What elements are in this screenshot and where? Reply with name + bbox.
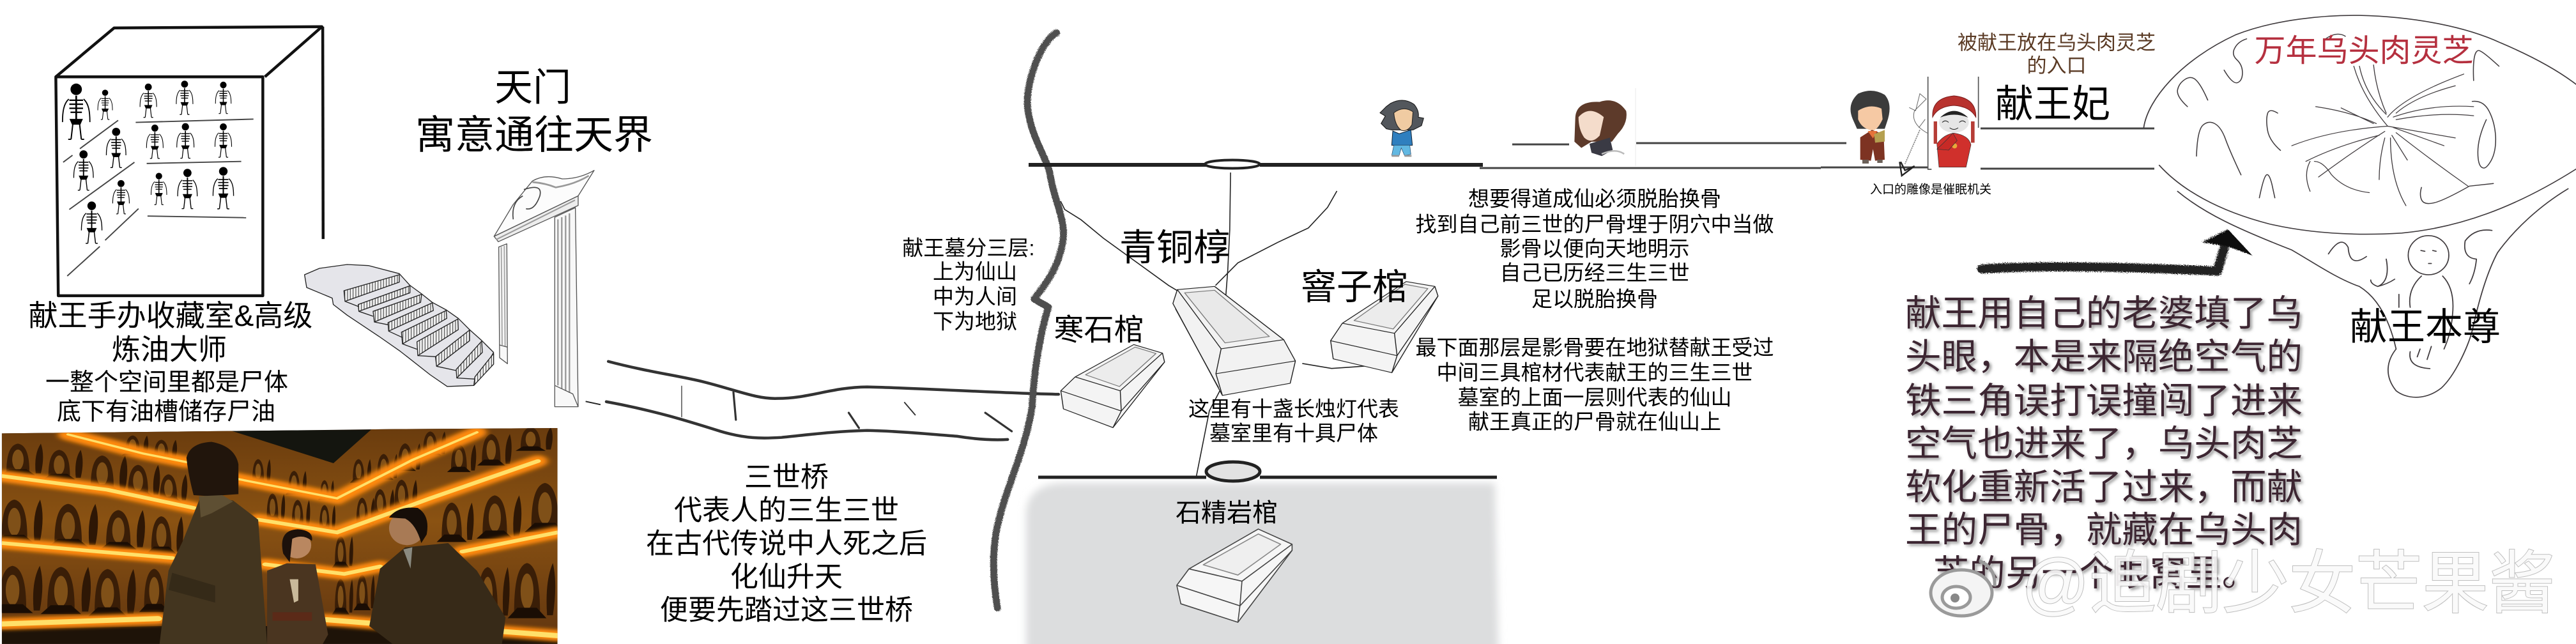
character: curly hair woman bbox=[1574, 100, 1627, 156]
wall niches bbox=[0, 427, 575, 618]
text: hypnosis statue note: 入口的雕像是催眠机关 bbox=[1870, 183, 1991, 197]
three-lives bridge bbox=[606, 362, 1059, 440]
text: entry note: 的入口 bbox=[2027, 55, 2087, 77]
text: burial explanation: 中间三具棺材代表献王的三生三世 bbox=[1436, 360, 1753, 385]
statue sketch and arrow bbox=[1899, 94, 1928, 176]
text: three-lives bridge: 在古代传说中人死之后 bbox=[646, 528, 927, 560]
coffin: bronze bbox=[1173, 286, 1296, 395]
mushroom cap bbox=[2143, 15, 2576, 128]
text: entry note: 被献王放在乌头肉灵芝 bbox=[1958, 32, 2156, 54]
illuminated walls bbox=[2, 428, 558, 634]
icon: weibo logo bbox=[1931, 561, 1995, 616]
heading: collection room: 底下有油槽储存尸油 bbox=[57, 399, 275, 425]
lit shelves bbox=[2, 433, 558, 636]
photo: film still of the oil chamber bbox=[0, 422, 575, 644]
diagram: giant mushroom and king bbox=[2143, 15, 2576, 397]
coffin: cellar bbox=[1331, 282, 1438, 372]
text: burial explanation: 献王真正的尸骨就在仙山上 bbox=[1468, 410, 1721, 433]
text: main story bbox=[1905, 293, 2303, 593]
bride with niche bbox=[1928, 77, 1979, 169]
stem and body bbox=[2177, 188, 2568, 397]
text: three-lives bridge: 三世桥 bbox=[744, 461, 829, 493]
label: cold stone coffin: 寒石棺 bbox=[1054, 313, 1144, 346]
text: three layers of the tomb: 下为地狱 bbox=[933, 309, 1017, 334]
heading: collection room: 炼油大师 bbox=[112, 334, 227, 365]
text: burial explanation: 墓室的上面一层则代表的仙山 bbox=[1458, 386, 1731, 409]
coffin: stone essence bbox=[1177, 529, 1292, 622]
label: cellar coffin: 窨子棺 bbox=[1301, 267, 1408, 307]
character: long hair man bbox=[1380, 100, 1423, 157]
text: main story: 王的尸骨，就藏在乌头肉 bbox=[1905, 510, 2303, 549]
label: mushroom title: 万年乌头肉灵芝 bbox=[2254, 34, 2474, 68]
skeletons bbox=[63, 80, 234, 243]
text: three layers of the tomb: 上为仙山 bbox=[933, 259, 1017, 284]
text: three-lives bridge: 化仙升天 bbox=[730, 561, 843, 593]
heading: collection room bbox=[29, 299, 312, 425]
text: three layers of the tomb bbox=[902, 236, 1035, 334]
text: ten lamps: 这里有十盏长烛灯代表 bbox=[1188, 397, 1399, 420]
brush wall line bbox=[993, 33, 1064, 608]
text: ten lamps bbox=[1188, 397, 1399, 445]
ceiling bbox=[229, 430, 373, 463]
text: burial explanation: 最下面那层是影骨要在地狱替献王受过 bbox=[1416, 336, 1774, 359]
text: three layers of the tomb: 中为人间 bbox=[933, 285, 1017, 308]
man at right bbox=[369, 507, 505, 644]
arrow bbox=[1982, 229, 2252, 271]
text: main story: 铁三角误打误撞闯了进来 bbox=[1905, 381, 2303, 420]
heading: collection room: 一整个空间里都是尸体 bbox=[45, 369, 288, 396]
niche outline bbox=[1928, 77, 1979, 169]
text: three-lives bridge: 代表人的三生三世 bbox=[674, 494, 899, 526]
thin connection lines bbox=[1061, 172, 1396, 477]
lower level grey zone bbox=[1026, 483, 1499, 644]
heaven gate door bbox=[494, 171, 601, 407]
text: burial explanation: 找到自己前三世的尸骨埋于阴穴中当做 bbox=[1416, 212, 1774, 236]
mushroom curls bbox=[2177, 34, 2499, 204]
text: three-lives bridge bbox=[646, 461, 927, 626]
heading: collection room: 献王手办收藏室&高级 bbox=[29, 299, 312, 332]
text: three layers of the tomb: 献王墓分三层: bbox=[902, 236, 1035, 259]
box outline bbox=[56, 27, 323, 296]
stairs bbox=[305, 264, 494, 387]
character: man in red coat bbox=[1850, 91, 1890, 164]
panel: handmade collection room box bbox=[56, 27, 323, 296]
man at left bbox=[160, 442, 267, 644]
label: bronze coffin: 青铜椁 bbox=[1119, 227, 1230, 268]
mushroom mycelium bbox=[2292, 65, 2474, 206]
label: king himself: 献王本尊 bbox=[2350, 306, 2501, 348]
coffins bbox=[1061, 282, 1438, 622]
text: main story: 空气也进来了，乌头肉芝 bbox=[1905, 423, 2303, 464]
text: burial explanation: 自己已历经三生三世 bbox=[1500, 261, 1689, 285]
woman in centre bbox=[267, 529, 328, 644]
heading: heaven gate: 天门 bbox=[494, 66, 571, 109]
label: stone essence coffin: 石精岩棺 bbox=[1176, 499, 1278, 527]
pediment bbox=[494, 171, 594, 236]
bride figure bbox=[1933, 96, 1976, 167]
text: burial explanation bbox=[1416, 187, 1774, 433]
king figure bbox=[2399, 236, 2453, 369]
right pillar bbox=[555, 208, 578, 407]
glow of lit shelves bbox=[2, 433, 558, 636]
text: main story: 软化重新活了过来，而献 bbox=[1905, 466, 2303, 507]
text: main story: 献王用自己的老婆填了乌 bbox=[1905, 293, 2303, 334]
text: burial explanation: 足以脱胎换骨 bbox=[1531, 288, 1658, 310]
heading: heaven gate bbox=[415, 66, 653, 157]
figures in the photo bbox=[160, 442, 505, 644]
heading: heaven gate: 寓意通往天界 bbox=[415, 114, 653, 157]
text: main story: 芝的另一个眼窝里。 bbox=[1933, 553, 2258, 593]
left pillar bbox=[499, 244, 507, 364]
shelves bbox=[63, 119, 254, 276]
text: entry note bbox=[1958, 32, 2156, 77]
coffin: cold stone bbox=[1061, 344, 1165, 427]
text: main story: 头眼，本是来隔绝空气的 bbox=[1905, 336, 2303, 377]
text: ten lamps: 墓室里有十具尸体 bbox=[1209, 422, 1378, 445]
text: burial explanation: 影骨以便向天地明示 bbox=[1500, 236, 1689, 261]
label: Xian wang consort: 献王妃 bbox=[1995, 83, 2110, 125]
lower curls bbox=[2328, 230, 2492, 286]
text: burial explanation: 想要得道成仙必须脱胎换骨 bbox=[1468, 187, 1721, 211]
watermark: @追剧少女芒果酱 bbox=[2021, 545, 2556, 622]
horizontal level lines and openings bbox=[1029, 88, 2154, 481]
text: three-lives bridge: 便要先踏过这三世桥 bbox=[660, 594, 913, 626]
